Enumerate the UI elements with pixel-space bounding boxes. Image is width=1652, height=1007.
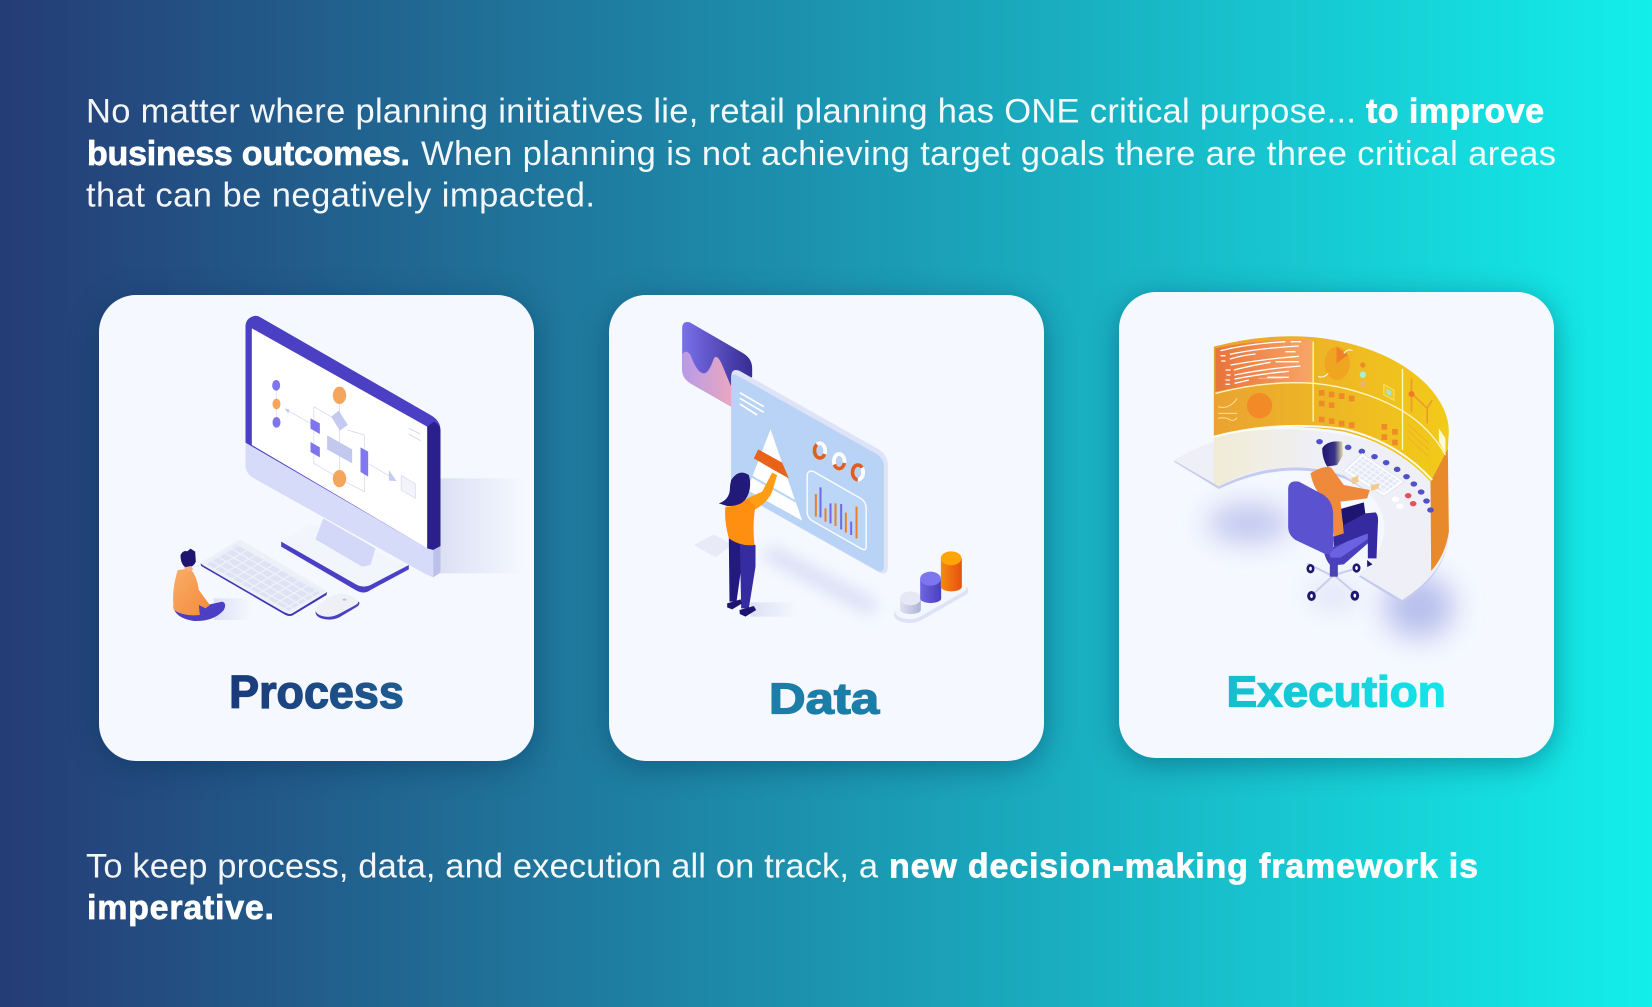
icon: desk buttons — [1316, 439, 1433, 513]
icon: operator — [1288, 441, 1378, 567]
icon: keyboard — [200, 540, 327, 616]
text block: intro paragraph: to improve — [1366, 93, 1544, 131]
chart: donuts — [814, 443, 863, 480]
text block: intro paragraph: that can be negatively impacted. — [86, 177, 595, 215]
text block: closing paragraph: To keep process, data, and execution all on track, a — [86, 848, 879, 886]
text block: closing paragraph: imperative. — [87, 889, 274, 927]
text block: intro paragraph: When planning is not achieving target goals there are three critical areas — [421, 135, 1556, 173]
icon: monitor — [245, 316, 440, 577]
title: Process: Process — [229, 666, 403, 718]
illustration: woman at data dashboard — [682, 322, 968, 623]
text block: intro paragraph: No matter where planning initiatives lie, retail planning has ONE critical purpose... — [86, 93, 1356, 131]
icon: mouse — [315, 594, 359, 620]
diagram: flowchart on screen — [272, 380, 420, 498]
chart: bars — [807, 471, 866, 550]
title: Execution: Execution — [1226, 669, 1445, 717]
icon: curved screen — [1213, 336, 1448, 571]
panel: execution — [1118, 292, 1554, 758]
text block: closing paragraph — [86, 848, 1478, 927]
icon: curved desk — [1173, 429, 1448, 603]
illustration: control desk operator — [1173, 336, 1453, 638]
icon: wave chart card — [682, 322, 752, 407]
text block: closing paragraph: new decision-making framework is — [889, 848, 1478, 886]
icon: seated person — [173, 549, 250, 621]
text block: intro paragraph — [86, 93, 1556, 215]
icon: monitor base — [281, 518, 408, 592]
chart: pyramid — [747, 429, 802, 521]
title: Data: Data — [768, 675, 880, 723]
icon: chair — [1306, 530, 1369, 601]
text block: intro paragraph: business outcomes. — [87, 135, 410, 173]
icon: cylinders on tray — [893, 551, 968, 623]
icon: woman — [718, 473, 797, 617]
illustration: computer with seated person — [173, 316, 523, 621]
panel: process — [98, 295, 534, 760]
panel: data — [608, 295, 1044, 760]
icon: desk keyboard — [1343, 453, 1403, 496]
panel: dashboard screen — [731, 370, 887, 574]
